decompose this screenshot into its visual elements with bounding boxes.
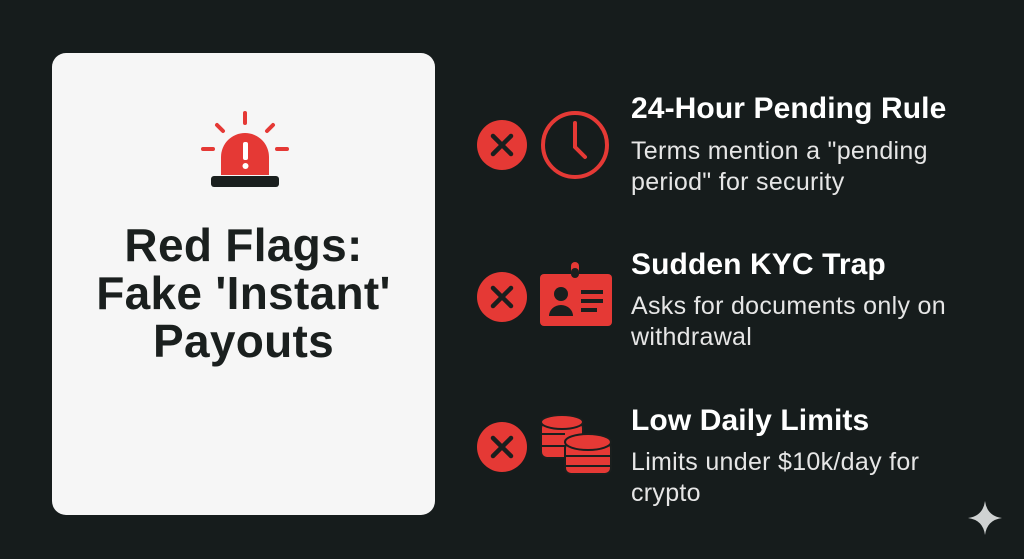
- description: Limits under $10k/day for: [631, 448, 919, 476]
- description: [631, 137, 928, 196]
- description: crypto: [631, 479, 701, 507]
- title: Fake 'Instant': [96, 267, 391, 319]
- title: Red Flags:: [124, 219, 363, 271]
- heading: 24-Hour Pending Rule: [631, 92, 946, 125]
- icon: x mark: [477, 272, 527, 322]
- heading: Sudden KYC Trap: [631, 248, 886, 281]
- icon: id card: [540, 262, 612, 326]
- title: Payouts: [153, 315, 334, 367]
- description: [631, 292, 946, 351]
- description: withdrawal: [631, 323, 752, 351]
- title: [96, 219, 391, 367]
- description: Terms mention a "pending: [631, 137, 928, 165]
- row 2: [477, 248, 946, 351]
- icon: coins: [542, 416, 610, 473]
- icon: x mark: [477, 120, 527, 170]
- icon: clock: [541, 111, 609, 179]
- icon: sparkle: [968, 501, 1002, 535]
- icon: x mark: [477, 422, 527, 472]
- heading: Low Daily Limits: [631, 404, 869, 437]
- row 3: [477, 404, 919, 507]
- row 1: [477, 92, 946, 196]
- description: Asks for documents only on: [631, 292, 946, 320]
- description: period" for security: [631, 168, 845, 196]
- description: [631, 448, 919, 507]
- panel: title card: [52, 53, 435, 515]
- icon: siren: [201, 111, 289, 187]
